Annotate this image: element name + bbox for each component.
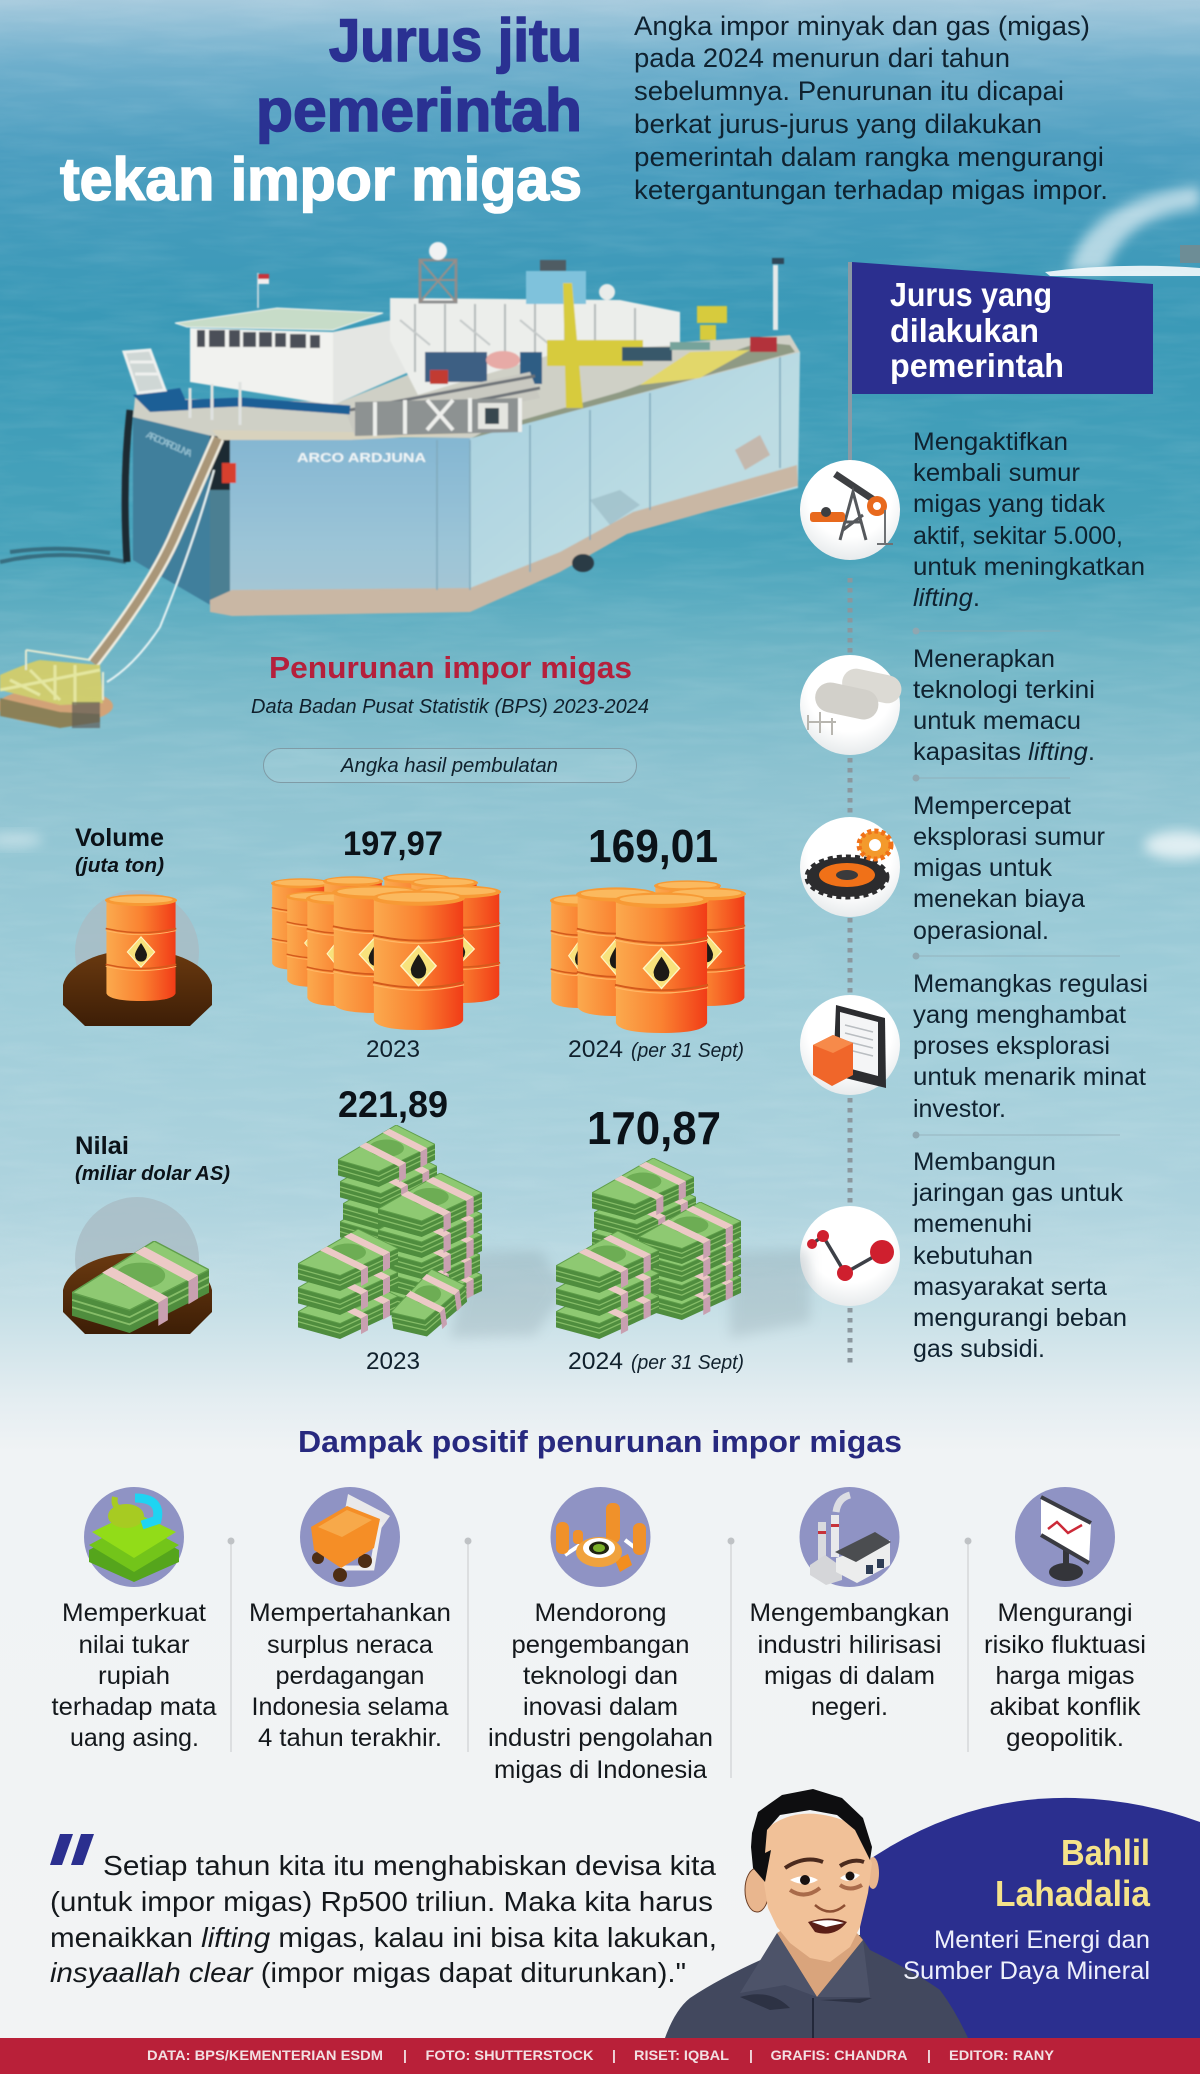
footer credits: | [403,2047,407,2063]
label: 2023: 2023 [366,1036,420,1063]
speaker role [903,1926,1150,1985]
left side hull [133,417,212,606]
intro text: berkat jurus-jurus yang dilakukan [634,109,1042,139]
money shadows [450,1250,810,1338]
money stacks 2024 [556,1158,741,1339]
white superstructure [190,315,418,405]
intro text: ketergantungan terhadap migas impor. [634,175,1108,205]
impact 4 text: migas di dalam [764,1662,935,1690]
speaker name: Lahadalia [995,1873,1151,1914]
flag [258,273,269,308]
title [60,7,582,213]
label: Volume: (juta ton) [75,855,164,877]
icon: shopping cart [300,1487,400,1587]
step 1 text: kembali sumur [913,459,1080,487]
barrels 2023 [271,873,501,1030]
black hose [125,410,130,562]
step 4 text: investor. [913,1095,1006,1123]
step 5 text: gas subsidi. [913,1335,1045,1363]
intro text: pada 2024 menurun dari tahun [634,43,1010,73]
money stacks 2023 [298,1125,482,1341]
step 3 text: migas untuk [913,854,1053,882]
impact 1 text [52,1599,217,1752]
quote text [50,1850,717,1988]
quote text: Setiap tahun kita itu menghabiskan devisa kita [103,1850,716,1881]
quote text: menaikkan lifting migas, kalau ini bisa kita lakukan, [50,1922,717,1953]
flag panel: Jurus yang dilakukan pemerintah: pemerintah [890,347,1064,384]
icon: money bundle on pedestal [63,1197,212,1334]
step 1 text: aktif, sekitar 5.000, [913,522,1123,550]
impact 5 text: Mengurangi [998,1599,1132,1627]
separators [913,628,1120,1138]
yellow derrick [547,283,727,408]
impact 4 text: negeri. [811,1693,888,1721]
icon: money and exchange [84,1487,184,1587]
icon: network nodes [800,1206,900,1306]
photo: floating storage vessel Arco Ardjuna [0,242,800,682]
fender [572,554,594,572]
barrels 2024 [550,880,746,1033]
step 5 text: jaringan gas untuk [912,1179,1124,1207]
speaker name: Bahlil [1061,1832,1150,1873]
speaker role: Menteri Energi dan [934,1926,1150,1954]
footer credits [0,2038,1200,2074]
step 5 text [912,1148,1127,1363]
footer credits: FOTO: SHUTTERSTOCK [426,2047,594,2063]
intro text: sebelumnya. Penurunan itu dicapai [634,76,1064,106]
footer credits: RISET: IQBAL [634,2047,729,2063]
step 5 text: kebutuhan [913,1242,1033,1270]
label: 2024 value per 31 Sept: (per 31 Sept) [631,1352,744,1374]
impact 2 text: 4 tahun terakhir. [258,1724,442,1752]
impact 1 text: rupiah [98,1662,170,1690]
speaker role: Sumber Daya Mineral [903,1957,1150,1985]
step 3 text: Mempercepat [913,792,1071,820]
corner column [210,435,232,614]
label: Nilai: (miliar dolar AS) [75,1163,230,1185]
front hull [230,438,472,614]
mooring lines [93,438,218,682]
step 5 text: Membangun [913,1148,1056,1176]
step 4 text: Memangkas regulasi [913,970,1148,998]
pill note [264,748,636,782]
step 3 text: operasional. [913,917,1049,945]
value: 169,01: 169,01 [588,820,718,872]
impact 1 text: nilai tukar [78,1631,190,1659]
icon: offshore separator [550,1487,650,1587]
step 4 text: yang menghambat [913,1001,1126,1029]
step 1 text: Mengaktifkan [913,428,1068,456]
step 1 text [913,428,1145,612]
label: Volume [75,824,164,877]
timeline: pole and dots [848,262,852,1368]
pill note: Angka hasil pembulatan [340,755,558,777]
impact 3 text: inovasi dalam [523,1693,678,1721]
footer credits: DATA: BPS/KEMENTERIAN ESDM [147,2047,383,2063]
blue pipe [170,402,350,410]
title: Jurus jitu [329,7,582,74]
helideck [175,308,383,330]
step 2 text: kapasitas lifting. [913,738,1095,766]
impact 5 text: akibat konflik [990,1693,1141,1721]
value: 170,87: 170,87 [587,1102,721,1154]
blue tower block [526,271,586,304]
step 5 text: mengurangi beban [913,1304,1127,1332]
impact 4 text: industri hilirisasi [758,1631,942,1659]
label: 2024 value per 31 Sept [568,1348,744,1375]
flag panel: Jurus yang dilakukan pemerintah: dilakukan [890,312,1039,349]
impact 5 text [984,1599,1146,1752]
footer credits: GRAFIS: CHANDRA [770,2047,908,2063]
flag panel: Jurus yang dilakukan pemerintah: Jurus yang [890,276,1052,313]
step 1 text: migas yang tidak [913,490,1105,518]
impact 3 text: teknologi dan [523,1662,678,1690]
value: 197,97: 197,97 [343,825,443,863]
step 2 text: teknologi terkini [913,676,1095,704]
label: Nilai: Nilai [75,1132,129,1160]
subheading: data source: Data Badan Pusat Statistik (BPS) 2023-2024 [251,696,649,718]
quote text: (untuk impor migas) Rp500 triliun. Maka kita harus [50,1886,713,1917]
step 3 text: menekan biaya [913,885,1085,913]
title: tekan impor migas [60,146,582,213]
impact 1 text: uang asing. [70,1724,199,1752]
step 1 text: lifting. [913,584,980,612]
value: 221,89: 221,89 [338,1084,448,1125]
mast [773,265,778,330]
step 4 text [913,970,1148,1123]
impact 5 text: risiko fluktuasi [984,1631,1146,1659]
machinery [345,351,542,436]
left crane [124,350,165,393]
footer credits: | [927,2047,931,2063]
step 3 text [913,792,1105,945]
step 3 text: eksplorasi sumur [913,823,1105,851]
step 4 text: untuk menarik minat [913,1063,1146,1091]
footer credits: EDITOR: RANY [949,2047,1055,2063]
intro text: pemerintah dalam rangka mengurangi [634,142,1104,172]
impact 2 text: perdagangan [276,1662,424,1690]
icon: factory [800,1487,900,1587]
dividers [228,1538,972,1778]
impact 1 text: Memperkuat [62,1599,206,1627]
impact 2 text: Indonesia selama [252,1693,449,1721]
flag panel: Jurus yang dilakukan pemerintah [852,262,1153,394]
speaker name [995,1832,1151,1914]
portrait: Bahlil Lahadalia [665,1789,968,2038]
label: 2024 value per 31 Sept: 2024 [568,1348,623,1375]
impact 5 text: geopolitik. [1006,1724,1124,1752]
step 2 text [913,645,1095,766]
photo: offshore buoy platform [0,650,113,728]
speaker panel background [860,1798,1200,2038]
impact 3 text: Mendorong [534,1599,666,1627]
quote text: insyaallah clear (impor migas dapat diturunkan)." [50,1957,686,1988]
step 2 text: untuk memacu [913,707,1081,735]
label: 2023 value: 2023 [366,1348,420,1375]
heading: Penurunan impor migas: Penurunan impor migas [269,650,632,685]
step 1 text: untuk meningkatkan [913,553,1145,581]
radar tower [420,242,456,302]
step 5 text: masyarakat serta [913,1273,1107,1301]
intro text [634,11,1108,205]
deck [133,335,800,438]
impact 3 text: industri pengolahan [488,1724,713,1752]
footer credits: | [612,2047,616,2063]
impact 2 text: surplus neraca [267,1631,433,1659]
icon: storage tanks [800,655,904,755]
label: Volume: Volume [75,824,164,852]
impact 2 text [249,1599,451,1752]
intro text: Angka impor minyak dan gas (migas) [634,11,1090,41]
heading: Dampak positif: Dampak positif penurunan impor migas [298,1424,902,1459]
label: Nilai [75,1132,230,1185]
step 2 text: Menerapkan [913,645,1055,673]
label: 2024 per 31 Sept: 2024 [568,1036,623,1063]
impact 1 text: terhadap mata [52,1693,217,1721]
windows [197,330,320,348]
icon: pump jack [800,460,900,560]
impact 4 text: Mengembangkan [750,1599,950,1627]
impact 4 text [750,1599,950,1721]
label: 2024 per 31 Sept: (per 31 Sept) [631,1040,744,1062]
step 4 text: proses eksplorasi [913,1032,1110,1060]
impact 5 text: harga migas [996,1662,1134,1690]
impact 3 text: pengembangan [512,1631,690,1659]
impact 2 text: Mempertahankan [249,1599,451,1627]
long hull side [470,352,800,606]
icon: document tablet [800,995,900,1095]
step 5 text: memenuhi [913,1210,1032,1238]
icon: gears [800,817,900,917]
impact 3 text [488,1599,713,1784]
photo: floating storage vessel Arco Ardjuna: ARCO ARDJUNA [144,430,194,460]
icon: single barrel on pedestal [63,890,212,1026]
impact 3 text: migas di Indonesia [494,1756,707,1784]
hull name: ARCO ARDJUNA [297,450,427,465]
title: pemerintah [256,77,582,144]
quote mark [50,1834,94,1865]
icon: presentation board [1015,1487,1115,1587]
footer credits: | [749,2047,753,2063]
label: 2024 per 31 Sept [568,1036,744,1063]
